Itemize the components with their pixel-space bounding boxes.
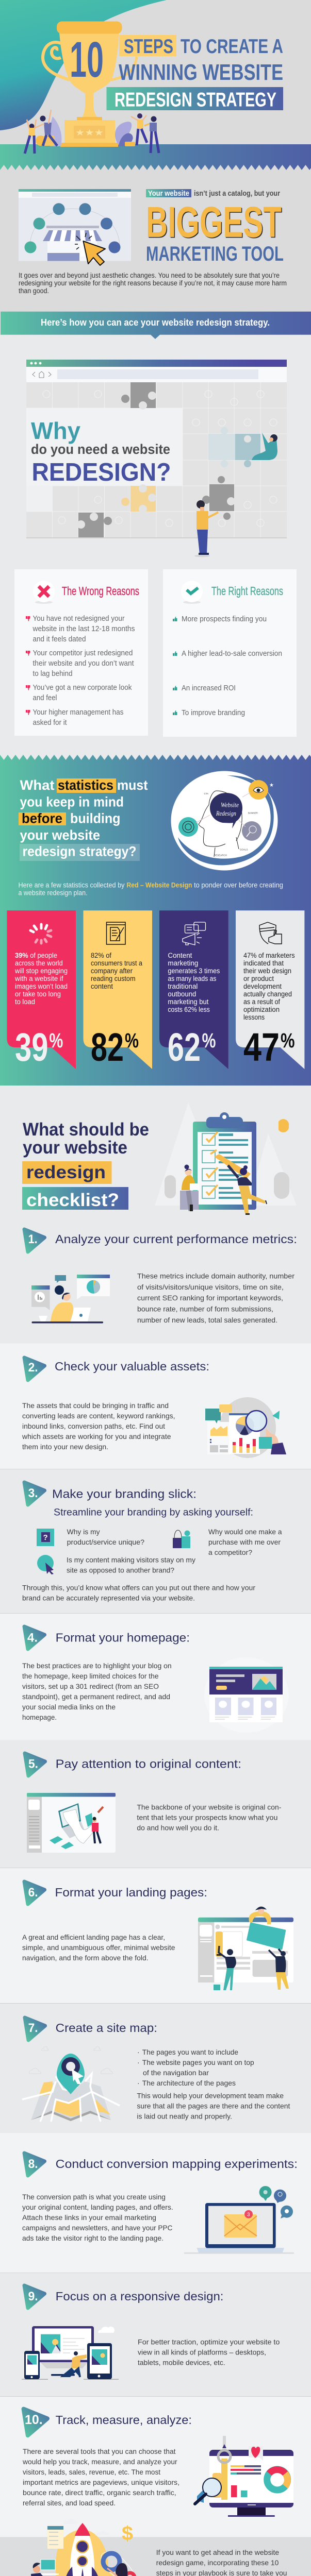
step 5 text: tent that lets your prospects know what you <box>137 1814 277 1822</box>
step 2 heading: 2. <box>28 1361 38 1375</box>
statistics intro <box>19 882 283 897</box>
step 6 heading: 6. <box>28 1886 38 1900</box>
step 1 text: number of new leads, total sales generated. <box>137 1316 277 1324</box>
subheading: isn’t just a catalog, but your <box>194 189 280 198</box>
head illustration: ★ <box>269 783 274 788</box>
head illustration: GOALS <box>240 848 248 851</box>
panel: step 6 <box>0 1868 311 2003</box>
step 9 heading: Focus on a responsive design: <box>56 2290 223 2303</box>
why heading: REDESIGN? <box>32 459 171 486</box>
rocket illustration: $ <box>122 2523 133 2545</box>
conclusion text <box>156 2548 287 2576</box>
step 4 text: The best practices are to highlight your blog on <box>22 1662 172 1670</box>
question: competitor: purchase with me over <box>208 1538 281 1546</box>
question: unique: Why is my <box>67 1528 100 1536</box>
step 1 heading: 1. <box>28 1232 38 1246</box>
stat card 62%: outbound <box>168 990 196 998</box>
puzzle pieces <box>77 382 260 537</box>
step 10 text: important metrics are pageviews, unique visitors, <box>23 2478 179 2486</box>
step 7 heading: Create a site map: <box>56 2021 157 2035</box>
step 7 list: · <box>137 2048 140 2056</box>
statistics intro: Red – Website Design <box>127 882 192 889</box>
statistics intro: Here are a few statistics collected by <box>19 882 125 889</box>
subheading <box>146 189 284 265</box>
icon: puzzle: ? <box>43 1533 48 1542</box>
stat card 82%: % <box>125 1029 139 1052</box>
panel: step 4 <box>0 1614 311 1740</box>
step 10 text: visitors, leads, sales, revenue, etc. The most <box>23 2468 160 2476</box>
stat card 39%: 39% of people <box>15 952 57 959</box>
step 9 text <box>138 2338 280 2367</box>
wrong reasons list: and feel <box>33 694 57 702</box>
step 5 heading: Pay attention to original content: <box>56 1757 241 1771</box>
step 5 heading <box>25 1753 241 1776</box>
stat card 47% <box>236 910 304 1070</box>
intro paragraph: It goes over and beyond just aesthetic changes. You need to be absolutely sure that you’re <box>19 272 280 279</box>
stat card 82%: consumers trust a <box>91 959 142 967</box>
step 4 text: standpoint), get a permanent redirect, and add <box>22 1692 170 1701</box>
statistics heading: your website <box>20 827 100 843</box>
stat card 47%: lessons <box>243 1013 265 1021</box>
step 10 heading <box>24 2409 192 2435</box>
stat card 62%: generates 3 times <box>168 967 220 975</box>
step 7 list <box>137 2048 290 2121</box>
step 5 text: The backbone of your website is original con- <box>137 1803 282 1811</box>
stat card 39%: across the world <box>15 959 63 967</box>
stat card 39%: will stop engaging <box>14 967 68 975</box>
responsive devices illustration <box>22 2326 119 2380</box>
statistics heading: What <box>20 777 55 793</box>
step 2 text <box>22 1401 175 1451</box>
step 10 text: There are several tools that you can choose that <box>23 2447 176 2455</box>
step 10 heading: 10. <box>25 2413 43 2427</box>
checklist heading: checklist? <box>26 1190 119 1210</box>
step 3 heading: 3. <box>28 1486 38 1500</box>
wrong reasons list: You’ve got a new corporate look <box>33 684 132 692</box>
intro paragraph: than good. <box>19 287 49 295</box>
step 4 heading <box>24 1626 190 1649</box>
stat card 47%: % <box>281 1029 295 1052</box>
people and plants <box>25 110 159 154</box>
step 7 list: · <box>137 2079 140 2087</box>
conclusion text: redesign game, incorporating these 10 <box>156 2558 279 2567</box>
icon: document <box>106 922 125 944</box>
icon: shopping bags <box>173 1530 190 1548</box>
icon: spinner <box>30 924 51 943</box>
stat card 47%: development <box>243 982 282 990</box>
stat card 62%: Content <box>168 952 192 959</box>
stat card 82%: 82% of <box>91 952 111 959</box>
step 3 conclusion: brand can be accurately represented via your website. <box>22 1594 195 1602</box>
icon: check <box>181 581 203 604</box>
stat card 82%: reading custom <box>91 975 135 982</box>
step 5 heading: 5. <box>28 1757 38 1771</box>
question: stay: Is my content making visitors stay on my <box>67 1556 195 1564</box>
head illustration: Redesign <box>216 809 236 817</box>
step 2 text: converting leads are content, keyword rankings, <box>22 1412 175 1420</box>
stat card 47%: as a result of <box>243 998 280 1006</box>
step 9 heading: 9. <box>28 2290 38 2303</box>
stat card 47%: indicated that <box>243 959 284 967</box>
stat card 47%: their web design <box>243 967 291 975</box>
step 6 text: A great and efficient landing page has a clear, <box>22 1933 165 1941</box>
step 8 text <box>22 2193 173 2242</box>
panel: step 10 <box>0 2397 311 2537</box>
intro paragraph <box>19 272 287 295</box>
teal blob <box>0 0 167 130</box>
step 7 list: This would help your development team make <box>137 2092 284 2100</box>
right reasons list: A higher lead-to-sale conversion <box>182 650 282 658</box>
person at top right <box>252 433 277 460</box>
step 8 heading: Conduct conversion mapping experiments: <box>56 2157 298 2171</box>
stat card 62%: marketing <box>168 959 198 967</box>
step 7 list: sure that all the pages are there and the content <box>137 2102 290 2110</box>
panel: step 5 <box>0 1740 311 1868</box>
step 9 text: tablets, mobile devices, etc. <box>138 2359 225 2367</box>
laptop illustration <box>184 2186 294 2253</box>
step 1 text: bounce rate, number of form submissions, <box>137 1305 273 1313</box>
panel: step 2 <box>0 1344 311 1469</box>
statistics heading: statistics <box>58 777 113 793</box>
title <box>70 31 283 111</box>
step 4 text: your social media links on the <box>22 1703 116 1711</box>
step 7 list: The pages you want to include <box>142 2048 238 2056</box>
step 7 heading <box>25 2018 157 2040</box>
checklist heading <box>22 1120 149 1210</box>
right reasons list: An increased ROI <box>182 684 236 692</box>
white title plate <box>26 408 183 486</box>
step 3 conclusion: Through this, you’d know what offers can you put out there and how your <box>22 1584 255 1592</box>
intro paragraph: redesigning your website for the right reasons because if you’re not, it may cause more harm <box>19 279 287 287</box>
step 10 text <box>22 2447 179 2507</box>
step 6 heading: Format your landing pages: <box>55 1886 207 1899</box>
step 3 heading <box>24 1482 197 1505</box>
step 7 list: The architecture of the pages <box>142 2079 236 2087</box>
stat card 47%: actually changed <box>243 990 292 998</box>
step 4 heading: Format your homepage: <box>56 1631 190 1645</box>
stat card 39%: with a website if <box>14 975 63 982</box>
map illustration <box>22 2046 120 2122</box>
step 2 text: The assets that could be bringing in traffic and <box>22 1401 169 1410</box>
wrong reasons list: website in the last 12-18 months <box>32 625 135 633</box>
panel: right reasons: The Right Reasons <box>211 584 283 598</box>
step 9 text: view in all kinds of platforms – desktops, <box>138 2348 266 2357</box>
step 2 text: them into your new design. <box>22 1443 108 1451</box>
panel: step 9 <box>0 2273 311 2397</box>
step 3 heading: Make your branding slick: <box>52 1487 197 1501</box>
step 1 text: current SEO ranking for important keywords, <box>137 1294 283 1302</box>
title: TO CREATE A <box>181 36 283 58</box>
step 10 heading: Track, measure, analyze: <box>56 2413 192 2427</box>
why heading <box>31 417 171 486</box>
step 5 text: do and how well you do it. <box>137 1824 219 1832</box>
step 4 text: the homepage, keep limited choices for the <box>22 1672 159 1680</box>
title: 10 <box>70 31 104 88</box>
stat card 62%: marketing but <box>168 998 209 1006</box>
stat card 39% <box>7 910 76 1070</box>
step 8 text: ads take the visitor right to the landing page. <box>22 2234 163 2242</box>
stat card 82%: company after <box>91 967 133 975</box>
statistics heading <box>19 777 148 861</box>
panel: right reasons <box>163 569 297 737</box>
step 7 list: The website pages you want on top <box>142 2058 254 2066</box>
question: competitor <box>208 1528 282 1556</box>
panel: conclusion <box>0 2519 311 2576</box>
statistics heading: before <box>22 811 62 826</box>
step 4 text <box>22 1662 172 1721</box>
panel: statistics <box>0 755 311 1086</box>
wrong reasons list: asked for it <box>33 719 67 727</box>
step 8 text: campaigns and newsletters, and have your PPC <box>22 2224 172 2232</box>
banner: Here’s how you can ace your website redesign strategy. <box>41 317 270 328</box>
wrong reasons list: their website and you don’t want <box>33 659 134 668</box>
stat card 39%: to load <box>15 998 35 1006</box>
wrong reasons list: Your competitor just redesigned <box>33 649 133 657</box>
head illustration: CTA <box>204 792 208 795</box>
monitor illustration <box>195 2436 293 2517</box>
trophy: ★★★ <box>75 128 104 138</box>
step 2 heading <box>24 1358 209 1380</box>
question: unique <box>67 1528 144 1546</box>
panel: checklist intro and step 1 <box>0 1086 311 1344</box>
step 4 text: homepage. <box>22 1713 57 1721</box>
stat card 47%: 47% of marketers <box>243 952 295 959</box>
step 6 text <box>22 1933 175 1962</box>
step 7 list: of the navigation bar <box>143 2069 209 2077</box>
step 9 text: For better traction, optimize your website to <box>138 2338 280 2346</box>
conclusion text: If you want to get ahead in the website <box>156 2548 279 2556</box>
icon: cross <box>33 581 55 604</box>
step 6 text: simple, and unambiguous offer, minimal website <box>22 1943 175 1952</box>
trophy <box>43 22 176 147</box>
icon: puzzle <box>37 1529 54 1546</box>
step 1 illustration <box>31 1275 110 1323</box>
panel: wrong reasons: The Wrong Reasons <box>62 584 139 598</box>
step 1 text <box>137 1272 294 1324</box>
stat card 47%: optimization <box>243 1006 280 1013</box>
panel: hero <box>0 0 311 312</box>
step 8 heading <box>24 2153 298 2176</box>
panel: step 8 <box>0 2133 311 2273</box>
panel: step 7 <box>0 2003 311 2133</box>
wrong reasons list: You have not redesigned your <box>33 615 125 623</box>
question: stay <box>67 1556 195 1574</box>
step 5 illustration <box>27 1793 116 1853</box>
icon: shield and thumb <box>259 922 282 944</box>
banner <box>1 312 311 339</box>
step 7 list: is laid out neatly and properly. <box>137 2112 232 2121</box>
stat card 62% <box>159 910 228 1070</box>
step 10 text: bounce rate, direct traffic, organic search traffic, <box>23 2488 176 2497</box>
stat card 62%: costs 62% less <box>168 1006 210 1013</box>
step 1 text: of visits/visitors/unique visitors, time on site, <box>137 1283 284 1291</box>
laptop illustration: 3 <box>247 2212 250 2217</box>
right reasons list: To improve branding <box>182 709 245 717</box>
title: STEPS <box>124 36 173 58</box>
wrong reasons list: to lag behind <box>33 670 72 678</box>
clipboard illustration <box>155 1103 297 1215</box>
step 2 heading: Check your valuable assets: <box>55 1360 209 1373</box>
panel: step 3 <box>0 1469 311 1614</box>
ground band <box>0 144 311 170</box>
question: competitor: Why would one make a <box>208 1528 282 1536</box>
step 6 heading <box>24 1882 207 1904</box>
statistics intro: a website redesign plan. <box>19 889 88 897</box>
stat card 39%: images won’t load <box>15 982 68 990</box>
wrong reasons list: and it feels dated <box>33 635 86 643</box>
step 6 illustration <box>198 1907 293 1990</box>
statistics heading: must <box>117 777 148 793</box>
stat card 39%: % <box>49 1029 63 1052</box>
head illustration: Website <box>221 801 239 809</box>
checklist heading: What should be <box>23 1120 149 1140</box>
statistics intro: to ponder over before creating <box>194 882 283 889</box>
step 10 text: referral sites, and load speed. <box>23 2499 116 2507</box>
step 1 heading: Analyze your current performance metrics: <box>55 1232 297 1246</box>
stat card 62%: traditional <box>168 982 198 990</box>
step 6 text: navigation, and the form above the fold. <box>22 1954 149 1962</box>
statistics heading: building <box>70 811 121 826</box>
stat card 82% <box>84 910 152 1070</box>
step 8 text: your original content, landing pages, and offers. <box>22 2203 173 2211</box>
step 7 list: · <box>137 2058 140 2066</box>
step 9 heading <box>24 2285 224 2308</box>
why heading: do you need a website <box>31 442 170 457</box>
question: stay: site as opposed to another brand? <box>67 1566 174 1574</box>
step 5 text <box>137 1803 282 1832</box>
step 8 heading: 8. <box>28 2157 38 2171</box>
browser: puzzle <box>26 360 287 557</box>
head illustration: RESEARCH <box>214 854 227 856</box>
step 4 text: visitors, set up a 301 redirect (from an SEO <box>22 1682 159 1690</box>
stat card 39%: 39 <box>15 1025 48 1070</box>
statistics heading: redesign strategy? <box>23 844 136 859</box>
step 8 text: Attach these links in your email marketing <box>22 2213 156 2222</box>
stat card 82%: 82 <box>91 1025 124 1070</box>
subheading: Your website <box>148 189 189 198</box>
why heading: Why <box>31 417 80 444</box>
wrong reasons list <box>26 615 135 727</box>
stat card 82%: content <box>91 982 113 990</box>
stat card 39%: or take too long <box>15 990 61 998</box>
step 3 conclusion <box>22 1584 255 1602</box>
icon: megaphone <box>183 922 205 945</box>
step 4 illustration <box>204 1657 289 1733</box>
step 10 text: would help you track, measure, and analyze your <box>22 2458 177 2466</box>
step 1 heading <box>24 1229 297 1252</box>
stat card 62%: 62 <box>168 1025 201 1070</box>
panel: step 3: Streamline your branding by asking yourself: <box>54 1507 253 1518</box>
head illustration: BANNER <box>248 812 258 814</box>
checklist heading: redesign <box>26 1162 106 1182</box>
step 2 illustration <box>205 1397 286 1458</box>
right reasons list <box>173 615 282 717</box>
step 8 text: The conversion path is what you create using <box>22 2193 166 2201</box>
stat card 47%: 47 <box>243 1025 280 1070</box>
step 7 heading: 7. <box>28 2021 38 2035</box>
head illustration <box>171 771 277 871</box>
person with puzzle piece <box>194 500 218 557</box>
right reasons list: More prospects finding you <box>182 615 267 623</box>
stat card 62%: as many leads as <box>168 975 217 982</box>
checklist heading: your website <box>23 1138 127 1158</box>
panel: wrong reasons <box>14 569 148 736</box>
step 2 text: inbound links, conversion paths, etc. Find out <box>22 1422 165 1430</box>
wrong reasons list: Your higher management has <box>33 708 124 717</box>
step 2 text: which assets are working for you and integrate <box>22 1432 171 1440</box>
stat card 62%: % <box>202 1029 216 1052</box>
rocket illustration <box>23 2519 137 2576</box>
step 4 heading: 4. <box>27 1631 38 1645</box>
icon: clock cursor <box>37 1555 54 1574</box>
stat card 47%: or product <box>243 975 274 982</box>
step 1 text: These metrics include domain authority, number <box>137 1272 294 1280</box>
statistics heading: you keep in mind <box>20 794 124 810</box>
question: competitor: a competitor? <box>208 1548 252 1556</box>
browser illustration: store <box>19 189 131 265</box>
question: unique: product/service unique? <box>67 1538 144 1546</box>
